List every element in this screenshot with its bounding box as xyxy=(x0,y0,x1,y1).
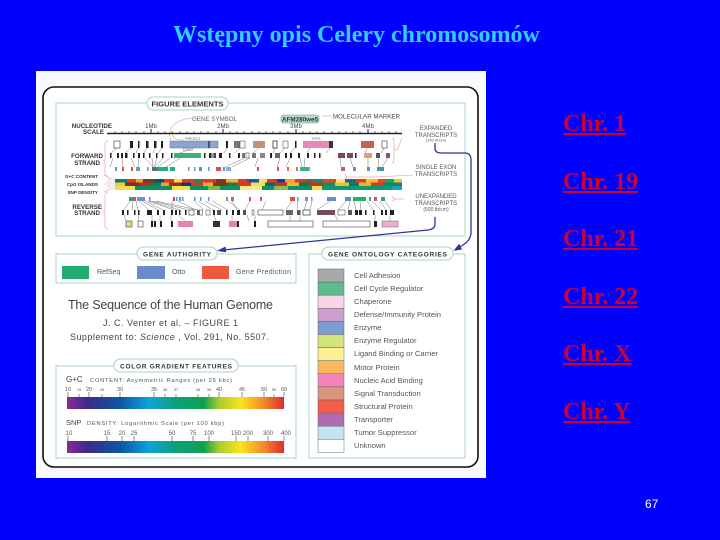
SNP density scale: SNP xyxy=(66,418,81,427)
label: unexpanded transcripts xyxy=(415,194,457,213)
row labels: REVERSE xyxy=(72,204,102,211)
ontology labels: Ligand Binding or Carrier xyxy=(354,349,438,358)
heading: gene ontology categories xyxy=(322,247,453,260)
genome feature band xyxy=(107,179,402,190)
heading: figure elements xyxy=(147,97,228,110)
SNP density scale: 10 xyxy=(66,431,73,437)
SNP density scale: 50 xyxy=(169,431,176,437)
ontology labels: Signal Transduction xyxy=(354,389,421,398)
forward strand connector lines xyxy=(110,148,388,167)
label: single exon transcripts xyxy=(415,165,457,178)
legend: RefSeq xyxy=(62,266,120,279)
row labels: STRAND xyxy=(74,210,101,217)
caption text: Supplement to: Science , Vol. 291, No. 5507. xyxy=(70,332,269,342)
gene symbol label: GENE SYMBOL xyxy=(192,116,238,123)
caption text: J. C. Venter et al. – FIGURE 1 xyxy=(103,318,238,328)
SNP gradient bar xyxy=(67,441,284,453)
panel: gene ontology categories xyxy=(309,247,465,458)
SNP density scale: 100 xyxy=(204,431,215,437)
nucleotide scale: 2Mb xyxy=(217,124,229,130)
G+C content scale: 20 xyxy=(86,387,92,393)
row brackets xyxy=(103,116,413,229)
G+C content scale: 45 xyxy=(239,387,245,393)
row labels: SNP DENSITY xyxy=(67,190,98,195)
sample gene names: PRKDC2 xyxy=(185,137,200,141)
ontology labels: Enzyme xyxy=(354,323,381,332)
link: Chr. 22: Chr. 22 xyxy=(563,284,638,310)
label: expanded transcripts: EXPANDED xyxy=(420,126,453,132)
ontology colour swatches xyxy=(318,269,344,452)
reverse strand small exons xyxy=(129,197,385,201)
panel: gene authority xyxy=(56,247,296,283)
ontology labels: Cell Cycle Regulator xyxy=(354,284,424,293)
G+C content scale: 60 xyxy=(281,387,287,393)
G+C content scale: 38 xyxy=(196,387,201,392)
label: unexpanded transcripts: TRANSCRIPTS xyxy=(415,201,457,207)
SNP density scale: 75 xyxy=(190,431,197,437)
SNP density scale: 300 xyxy=(263,431,274,437)
heading: color gradient features xyxy=(114,359,238,372)
label: expanded transcripts xyxy=(415,126,457,142)
arrow: expanded transcripts to gene ontology xyxy=(435,143,471,250)
link: Chr. Y: Chr. Y xyxy=(563,399,631,425)
row labels: STRAND xyxy=(74,160,101,167)
G+C content scale: 15 xyxy=(77,387,82,392)
label: unexpanded transcripts: (600 tb/cm) xyxy=(423,207,449,213)
heading: gene authority xyxy=(137,247,217,260)
ontology labels: Transporter xyxy=(354,415,393,424)
reverse strand connector lines xyxy=(124,201,391,221)
label: expanded transcripts: TRANSCRIPTS xyxy=(415,133,457,139)
SNP density scale: 200 xyxy=(243,431,254,437)
molecular marker: AFM280we5 xyxy=(282,116,319,124)
nucleotide scale xyxy=(107,124,402,134)
label: single exon transcripts: SINGLE EXON xyxy=(416,165,456,171)
ontology labels: Enzyme Regulator xyxy=(354,336,417,345)
rounded black border xyxy=(43,87,478,467)
row labels xyxy=(65,123,112,217)
nucleotide scale: 3Mb xyxy=(290,124,302,130)
legend: RefSeq: RefSeq xyxy=(97,269,120,276)
sample gene names xyxy=(182,137,320,152)
row labels: G+C CONTENT xyxy=(65,174,98,179)
row labels: NUCLEOTIDE xyxy=(72,123,112,130)
legend: Otto xyxy=(137,266,185,279)
figure panel xyxy=(36,71,486,478)
nucleotide scale: 4Mb xyxy=(362,124,374,130)
molecular marker: MOLECULAR MARKER xyxy=(333,114,401,120)
G+C content scale: 39 xyxy=(207,387,212,392)
link: Chr. 1: Chr. 1 xyxy=(563,111,626,137)
G+C content scale: 50 xyxy=(261,387,267,393)
sample gene names: TPP3 xyxy=(311,137,320,141)
row labels: SCALE xyxy=(83,129,104,136)
G+C content scale: 35 xyxy=(151,387,157,393)
forward strand small exons xyxy=(115,167,384,171)
reverse strand row 3 xyxy=(126,221,398,227)
SNP density scale: 25 xyxy=(131,431,138,437)
ontology labels: Chaperone xyxy=(354,297,392,306)
title: Wstępny opis Celery chromosomów xyxy=(173,22,540,48)
sample gene names: TGKO xyxy=(182,148,193,152)
panel: figure elements xyxy=(56,97,465,236)
ontology labels: Tumor Suppressor xyxy=(354,428,417,437)
link: Chr. X: Chr. X xyxy=(563,341,631,367)
heading: figure elements: FIGURE ELEMENTS xyxy=(152,100,224,108)
SNP density scale: 150 xyxy=(231,431,242,437)
ontology labels: Cell Adhesion xyxy=(354,271,400,280)
SNP density scale: 15 xyxy=(104,431,111,437)
forward strand row 1 xyxy=(114,141,387,148)
row labels: CpG ISLANDS xyxy=(67,182,98,187)
ontology labels: Structural Protein xyxy=(354,402,413,411)
ontology labels: Unknown xyxy=(354,441,386,450)
reverse strand row 2 xyxy=(122,210,394,215)
heading: gene ontology categories: GENE ONTOLOGY CATEGORIES xyxy=(328,252,448,258)
legend: Otto: Otto xyxy=(172,269,185,276)
ontology labels: Motor Protein xyxy=(354,363,400,372)
G+C content scale: 30 xyxy=(117,387,123,393)
label: expanded transcripts: (150 tb/cm) xyxy=(426,138,447,142)
legend: Gene Prediction: Gene Prediction xyxy=(236,269,291,276)
ontology labels: Defense/Immunity Protein xyxy=(354,310,441,319)
molecular marker xyxy=(281,114,401,124)
ontology labels xyxy=(354,271,441,450)
label: unexpanded transcripts: UNEXPANDED xyxy=(415,194,457,200)
SNP density scale: 400 xyxy=(281,431,292,437)
SNP density scale: DENSITY: Logarithmic Scale (per 100 kbp) xyxy=(87,421,224,427)
heading: color gradient features: COLOR GRADIENT FEATURES xyxy=(120,364,233,370)
heading: gene authority: GENE AUTHORITY xyxy=(143,252,212,258)
G+C content scale: 25 xyxy=(100,387,105,392)
SNP density scale: 20 xyxy=(119,431,126,437)
G+C content scale: 36 xyxy=(163,387,168,392)
G+C content scale: CONTENT: Asymmetric Ranges (per 25 kbc) xyxy=(90,378,232,384)
panel: color gradient features xyxy=(56,359,296,458)
link: Chr. 21: Chr. 21 xyxy=(563,226,638,252)
arrow: unexpanded transcripts to gene authority xyxy=(219,217,435,252)
row labels: FORWARD xyxy=(71,153,104,160)
G+C content scale: 37 xyxy=(174,387,179,392)
G+C content scale xyxy=(65,375,287,409)
G+C content scale: 40 xyxy=(216,387,222,393)
G+C gradient bar xyxy=(67,397,284,409)
nucleotide scale: 1Mb xyxy=(145,124,157,130)
G+C content scale: G+C xyxy=(66,375,83,384)
legend: Gene Prediction xyxy=(202,266,291,279)
G+C content scale: 55 xyxy=(272,387,277,392)
caption text xyxy=(68,298,273,342)
page number: 67 xyxy=(645,497,658,511)
SNP density scale xyxy=(66,418,292,453)
label: single exon transcripts: TRANSCRIPTS xyxy=(415,172,457,178)
caption text: The Sequence of the Human Genome xyxy=(68,298,273,312)
G+C content scale: 10 xyxy=(65,387,71,393)
ontology labels: Nucleic Acid Binding xyxy=(354,376,423,385)
forward strand row 2 xyxy=(110,153,390,158)
link: Chr. 19: Chr. 19 xyxy=(563,169,638,195)
